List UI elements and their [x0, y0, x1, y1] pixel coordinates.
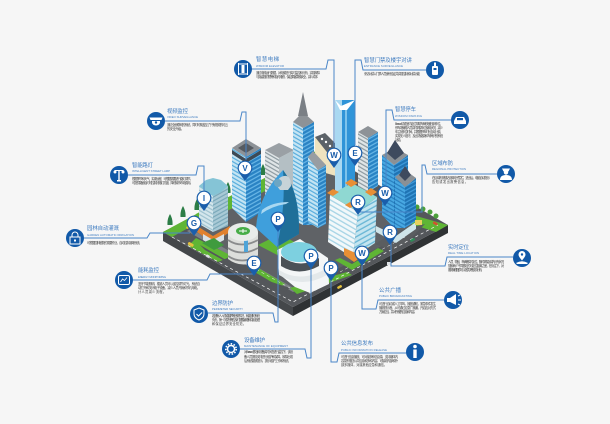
pin W lower: W: [358, 249, 366, 258]
pin P mall left: P: [308, 252, 314, 261]
callout: public information release: [331, 276, 424, 367]
description: 部多媒体，对接其他应急和通信。: [341, 362, 387, 367]
title: 实时定位: [448, 243, 470, 251]
callout: regional protection: [358, 159, 515, 212]
subtitle: REAL TIME LOCATION: [448, 251, 479, 255]
pin P upper: P: [275, 215, 281, 224]
description: 功能。: [395, 137, 403, 142]
description: 根据季节和天气，实现远程、可根据需要进行路灯调节，: [132, 176, 193, 181]
callout: maintenance of equipment: [222, 264, 311, 363]
pin G: G: [191, 219, 197, 228]
subtitle: WISDOM ELEVATOR: [256, 64, 284, 68]
description: 负责，第一次发布警告及时提醒管理和保安处理: [212, 317, 261, 322]
building: P teardrop tower: [256, 170, 299, 247]
pin V: V: [242, 164, 248, 173]
pin I: [197, 191, 211, 211]
description: 服务管理提供可以提供决策支持分析。: [448, 267, 484, 272]
pin E lower: E: [251, 259, 257, 268]
pin W upper: W: [330, 151, 338, 160]
title: 区域布防: [432, 159, 454, 167]
building: V tower: [232, 139, 261, 222]
callout: smart elevator: [234, 55, 334, 147]
description: [138, 281, 200, 294]
description: [256, 70, 321, 79]
city base slab: [163, 150, 448, 316]
callout: entrance guard and intercom: [355, 56, 444, 145]
description: 在区域布放基站设置电子围栏，进出后，电脑自动提示: [432, 175, 490, 180]
pin E upper: [348, 146, 362, 166]
subtitle: PUBLIC BROADCASTING: [379, 294, 412, 298]
small cars on the road: [186, 221, 438, 289]
icon: information: [406, 343, 424, 361]
leader line: [391, 240, 513, 266]
title: 边界防护: [212, 299, 233, 307]
leader line: [355, 60, 426, 145]
pin P upper: [271, 212, 285, 232]
description: 搜索两个不同基站的可定位距离之差，在标注下，对: [448, 263, 505, 268]
description: 和保证边界安全防范。: [212, 321, 246, 326]
icon: car: [451, 111, 469, 129]
leader line: [133, 270, 254, 280]
icon: camera: [147, 112, 165, 130]
description: 计人员减少流程。: [138, 289, 166, 294]
description: 的安全升级。: [167, 126, 184, 131]
description: 播放提示音，从可通过应急广播通，开启应对方式: [379, 305, 437, 310]
pin P mall right: P: [328, 264, 334, 273]
description: 备人员提前安排进行维护和保障，故障出现: [244, 354, 294, 359]
icon: irrigation lock: [66, 229, 84, 247]
pin R upper: [351, 195, 365, 215]
title: 园林自动灌溉: [87, 224, 120, 232]
pin R lower: [383, 225, 397, 245]
description: 蓝牙节能照明，楼道人员可以遥控调节灯光，系统自: [138, 281, 200, 286]
building: R white tower: [327, 179, 384, 270]
description: 若遇有人入侵或越界等违规情况，就能通知系统: [212, 313, 261, 318]
title: 智慧门禁及楼宇对讲: [364, 56, 413, 64]
pin W right: [378, 186, 392, 206]
subtitle: PERIMETER SECURITY: [212, 307, 243, 311]
pin R upper: R: [355, 198, 361, 207]
callout: intelligent street lamp: [110, 161, 204, 195]
pin P mall left: [304, 249, 318, 269]
callout: video surveillance: [147, 107, 246, 160]
building: I tower and orange podium: [197, 178, 230, 250]
description: 后系统能够提示，提示维护工作和系统。: [244, 358, 291, 363]
description: [379, 301, 437, 314]
pin E upper: E: [352, 149, 358, 158]
description: 容发布推送公共信息和多种内容，可接收内部和外: [341, 358, 399, 363]
leader line: [331, 276, 406, 362]
icon: gear: [222, 340, 240, 358]
title: 能耗监控: [138, 266, 160, 274]
subtitle: ENERGY MONITORING: [138, 275, 166, 279]
subtitle: REGIONAL PROTECTION: [432, 167, 466, 171]
title: 公共信息发布: [341, 339, 374, 347]
leader line: [208, 228, 278, 322]
description: Beacon精准室内定位帮助车辆快速找到车位，: [395, 121, 443, 126]
description: 通过全面联网的系统，同时可覆盖至了只有视频的可云: [167, 122, 228, 127]
pin I: I: [203, 194, 205, 203]
leader line: [362, 261, 444, 309]
description: 通过电梯运行数据，对电梯进行实时监控和分析，实现故障: [256, 70, 321, 75]
pin E lower: [247, 256, 261, 276]
callout: energy monitoring: [115, 266, 254, 294]
description: 来访对讲以门禁人员身份验证并实现控制和对讲功能: [364, 71, 421, 76]
description: [167, 122, 228, 131]
description: [395, 121, 444, 142]
description: 告知或发出报警信息。: [432, 179, 468, 184]
description: 对Beacon基站和设备实时状态进行监控下，该设: [244, 349, 294, 354]
icon: location: [513, 249, 531, 267]
description: 实现无人值守，及出场缴费和车牌识别系统: [395, 133, 444, 138]
description: [212, 313, 261, 326]
building: helipad tower: [228, 223, 258, 265]
icon: guard: [497, 165, 515, 183]
pin P mall right: [324, 261, 338, 281]
description: 方案应当，并对所播的信息和内容。: [379, 309, 417, 314]
leader line: [240, 264, 311, 358]
building: round mall: [277, 239, 329, 293]
building: W dark roof towers: [376, 140, 422, 243]
icon: street lamp: [110, 166, 128, 184]
callout: public broadcasting: [362, 261, 462, 314]
callout: garden irrigation: [66, 224, 190, 247]
title: 公共广播: [379, 286, 402, 294]
description: 停车场管理人员实时掌握车位使用状况，减少: [395, 125, 444, 130]
subtitle: MAINTENANCE OF EQUIPMENT: [244, 344, 288, 348]
icon: intercom: [426, 61, 444, 79]
building: glass main tower: [335, 100, 355, 192]
description: [432, 175, 490, 184]
callout: real time location: [391, 240, 531, 272]
icon: shield: [190, 305, 208, 323]
description: 人员、物品、车辆等实时定位，随时掌握区域内分布状况: [448, 259, 505, 264]
building: grey back tower: [265, 143, 294, 205]
description: 可进行信息播放，可对接多种信息源，支持媒体内: [341, 354, 398, 359]
title: 智能路灯: [132, 161, 154, 169]
subtitle: ENTRANCE SURVEILLANCE: [364, 64, 403, 68]
icon: energy monitor: [115, 271, 133, 289]
pin W lower: [355, 246, 369, 266]
callout: smart parking: [386, 105, 469, 185]
pin G: [187, 216, 201, 236]
location pins: [187, 146, 397, 281]
description: 可进行自动或人工呼叫，播放通知，紧急事件发生: [379, 301, 437, 306]
leader line: [165, 112, 246, 160]
pin W upper: [327, 148, 341, 168]
building: tall spire tower: [293, 92, 326, 228]
callout: perimeter security: [190, 228, 278, 326]
description: [244, 349, 294, 363]
isometric city illustration: [163, 92, 448, 316]
title: 设备维护: [244, 336, 265, 344]
subtitle: WISDOM PARKING: [395, 114, 422, 118]
leader line: [386, 110, 451, 185]
description: 可根据园林植物的需要作业，自动控制灌溉系统。: [87, 240, 142, 245]
description: [341, 354, 399, 367]
building: grey right tower: [358, 126, 378, 192]
title: 智慧电梯: [256, 55, 280, 63]
description: 可提供路面及时可控制好路灯亮度，降低城市市政费用。: [132, 180, 193, 185]
subtitle: VIDEO SURVEILLANCE: [167, 115, 198, 119]
description: 动打开和关闭电子设备，减少人员开销和节约用电。: [138, 285, 200, 290]
subtitle: INTELLIGENT STREET LAMP: [132, 169, 170, 173]
leader line: [358, 165, 497, 212]
leader line: [128, 166, 204, 195]
trees: [167, 164, 438, 225]
description: 与隐患提前预警和及时维修，保证乘客乘梯安全，减少成本: [256, 74, 319, 79]
description: [132, 176, 193, 185]
title: 智慧停车: [395, 105, 417, 113]
description: 车主找车位时间，并根据停车时长自动计费，: [395, 129, 443, 134]
leader line: [252, 60, 334, 147]
pin V: [238, 161, 252, 181]
title: 视频监控: [167, 107, 189, 115]
subtitle: GARDEN AUTOMATIC IRRIGATION: [87, 233, 134, 237]
pin R lower: R: [387, 228, 393, 237]
icon: elevator: [234, 60, 252, 78]
subtitle: PUBLIC INFORMATION RELEASE: [341, 348, 387, 352]
leader line: [84, 233, 190, 238]
description: [448, 259, 505, 272]
pin W right: W: [381, 189, 389, 198]
building: parking roof block: [315, 133, 340, 176]
icon: megaphone: [444, 291, 462, 309]
